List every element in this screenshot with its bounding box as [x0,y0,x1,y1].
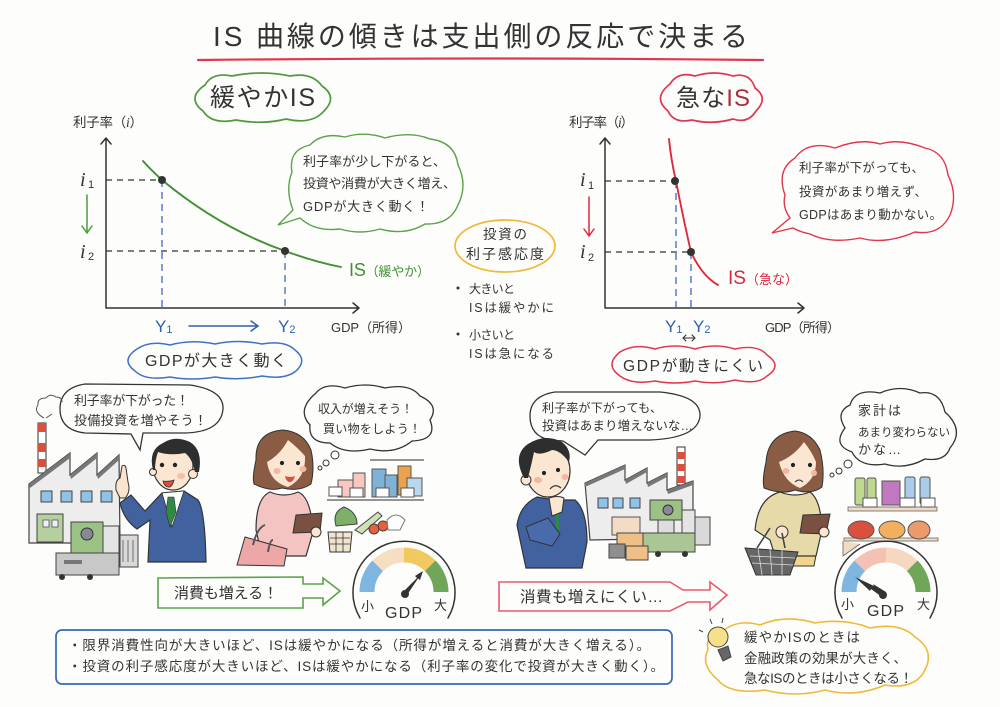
center note: sensitivity: 大きいと [469,282,515,296]
icon: factory left [29,395,138,580]
face [526,445,570,497]
heading: gentle IS cloud [195,73,331,122]
icon: light bulb [699,618,731,661]
speech: businessman left [60,384,223,450]
speech: woman thought right [830,388,956,477]
chart: gentle IS curve: 1 [88,179,94,191]
gauge: GDP low: 小 [841,597,854,612]
gauge: GDP low: 大 [917,597,930,612]
gauge: GDP high: GDP [385,605,422,622]
chart: steep IS curve: 1 [588,180,594,192]
speech: businessman right: 利子率が下がっても、 [542,400,662,415]
IS curve [143,161,341,267]
speech: businessman left: 投備投資を増やそう！ [74,413,207,428]
machine [695,517,710,545]
callout: policy takeaway: 金融政策の効果が大きく、 [744,650,907,666]
chart: steep IS curve: IS（急な） [728,268,798,289]
gauge: GDP low: GDP [867,603,904,620]
speech: woman thought left: 買い物をしよう！ [323,422,421,436]
gauge: GDP high [353,541,455,622]
machine [120,535,138,567]
figure: businessman pointing [116,439,206,562]
heading: steep IS cloud [660,73,762,122]
arrow: GDP rises [189,321,258,331]
center note: sensitivity [455,220,555,361]
chart: steep IS curve: i [580,241,586,263]
gauge segments [849,555,923,592]
heading: gentle IS cloud: 緩やかIS [210,84,315,112]
fruit baskets [848,521,874,539]
chart: gentle IS curve: 2 [88,251,94,263]
center note: sensitivity: 利子感応度 [466,246,544,262]
speech: woman thought right: 家計は [858,403,901,418]
shop shelves right [843,477,938,556]
hand on chin [549,496,564,516]
hair [519,438,570,478]
figure: businessman worried [517,438,587,568]
food packs [338,480,364,497]
callout: steep explanation: GDPはあまり動かない。 [799,208,942,222]
face [267,440,305,487]
hair [763,431,823,492]
skirt [775,555,816,566]
callout: gentle explanation [278,134,463,232]
gauge: GDP high: 大 [434,598,447,613]
panel: summary notes: ・投資の利子感応度が大きいほど、ISは緩やかになる（利子率の変化で投資が大きく動く）。 [68,658,664,674]
speech: businessman right [530,392,700,455]
shelves [848,507,937,511]
chart: gentle IS curve: i [80,241,86,263]
tablet [293,513,322,533]
chart: steep IS curve: 2 [588,252,594,264]
callout: steep explanation [772,142,954,240]
chart: gentle IS curve: 2 [289,324,295,336]
figure: woman shopping worried [745,431,830,575]
chart: gentle IS curve: 利子率（i） [73,115,143,130]
chart: steep IS curve: GDP（所得） [765,320,840,335]
center note: sensitivity: ISは緩やかに [469,301,554,315]
gauge needle [403,571,423,595]
callout: steep explanation: 利子率が下がっても、 [799,160,924,175]
arrow: interest rate falling [584,197,594,236]
axis labels: i [80,169,86,191]
speech: businessman left: 利子率が下がった！ [74,393,189,408]
callout: policy takeaway: 急なISのときは小さくなる！ [744,671,913,686]
factory smoke [36,395,62,418]
panel: summary notes [56,630,672,684]
shopping basket [745,548,798,575]
shopping basket [328,532,352,552]
chart axes [101,138,359,313]
arrow: consumption hardly rises: 消費も増えにくい… [520,588,663,606]
tablet [800,514,830,534]
callout: steep explanation: 投資があまり増えず、 [799,184,927,199]
center note: sensitivity: 小さいと [469,328,515,342]
cardboard boxes [617,533,643,546]
label: GDP moves a lot: GDPが大きく動く [145,352,287,370]
chart: steep IS curve: Y [693,317,704,336]
dashed guide lines [605,181,691,308]
chart: steep IS curve: Y [665,317,676,336]
pink bag [237,537,287,566]
face [153,442,193,490]
title: IS 曲線の傾きは支出側の反応で決まる [213,21,748,52]
panel: summary notes: ・限界消費性向が大きいほど、ISは緩やかになる（所得が増えると消費が大きく増える）。 [68,637,650,653]
arrow: interest rate falling [82,195,92,233]
shop shelves left [327,460,424,552]
callout: policy takeaway [706,619,928,694]
chart: gentle IS curve [73,115,430,336]
speech: woman thought left: 収入が増えそう！ [318,401,413,416]
callout: gentle explanation: GDPが大きく動く！ [303,199,429,214]
chart: steep IS curve: 1 [676,324,682,336]
price tags [329,487,342,496]
suit [120,491,206,562]
center note: sensitivity: 投資の [483,227,527,242]
label: GDP moves a lot [128,342,302,379]
shirt and tie [162,491,184,527]
gauge: GDP high: 小 [361,599,374,614]
axis labels: i [580,169,586,191]
arrow: consumption rises [158,577,340,608]
speech: woman thought left [304,385,433,470]
chart: gentle IS curve: GDP（所得） [331,320,411,335]
dashed guide lines [106,180,285,308]
callout: policy takeaway: 緩やかISのときは [744,630,860,645]
arrow: consumption rises: 消費も増える！ [174,585,278,602]
beige sweater [755,492,822,556]
gauge needle [855,577,886,597]
gauge segments [367,555,441,592]
callout: gentle explanation: 投資や消費が大きく増え、 [303,176,456,191]
label: GDP hardly moves: GDPが動きにくい [623,357,763,375]
face [779,442,816,488]
chart: steep IS curve [569,115,840,341]
chart: gentle IS curve: Y [155,317,166,336]
speech: businessman right: 投資はあまり増えないな… [542,418,693,433]
shelf lines [327,460,424,500]
callout: gentle explanation: 利子率が少し下がると、 [303,154,446,169]
center note: sensitivity: ISは急になる [469,346,554,361]
chart: gentle IS curve: 1 [166,324,172,336]
chimney [38,423,46,473]
bottles [855,478,865,505]
chart: gentle IS curve: IS（緩やか） [349,260,430,280]
arrow: consumption hardly rises [499,582,727,611]
figure: woman shopping happy [237,430,322,566]
hair back [253,430,313,489]
arrow: small GDP move [683,335,695,341]
folded arm [526,518,560,546]
chart axes [600,138,804,313]
hair [152,439,200,472]
pink sweater [256,492,313,556]
factory building [29,453,120,543]
chart: gentle IS curve: Y [278,317,289,336]
chimney [677,447,685,485]
speech: woman thought right: かな… [858,442,901,457]
IS curve [669,139,718,285]
factory building [585,465,693,540]
label: GDP hardly moves [612,346,775,383]
suit [517,497,587,568]
gauge: GDP low [835,541,937,620]
chart: steep IS curve: 利子率（i） [569,115,634,130]
icon: factory right [585,447,710,560]
heading: steep IS cloud: 急なIS [676,85,750,112]
chart: steep IS curve: 2 [704,324,710,336]
raised hand [116,465,129,498]
vegetables [335,507,357,526]
speech: woman thought right: あまり変わらない [858,426,950,439]
